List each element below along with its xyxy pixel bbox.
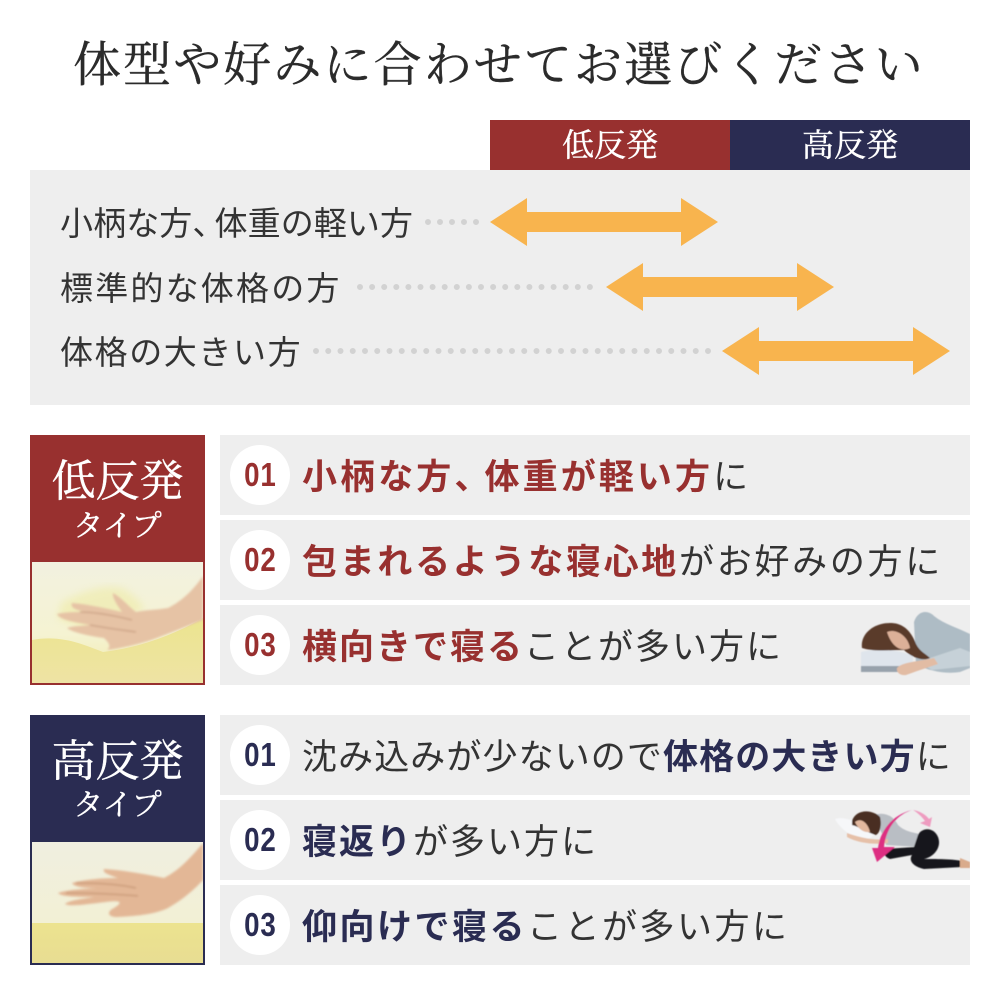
badge 03: [230, 895, 290, 955]
arrow: small build range: [490, 198, 718, 246]
label: standard build: 標準的な体格の方: [60, 270, 342, 307]
dots: row 3: [316, 348, 709, 354]
panel: high rebound type: [30, 715, 205, 965]
header: high rebound: 高反発: [802, 127, 898, 163]
heading: high rebound: 高反発: [52, 737, 184, 786]
dots: row 1: [428, 219, 477, 225]
arrow: standard build range: [606, 263, 834, 311]
label: large build: 体格の大きい方: [60, 334, 302, 371]
panel: body type chart: [30, 170, 970, 405]
row: low 01: [220, 435, 970, 515]
photo: hand resting on firm foam: [32, 842, 203, 963]
icon: woman sleeping on side: [860, 612, 970, 676]
badge 02: 02: [244, 541, 276, 578]
icon: woman turning over with arrows: [836, 810, 970, 870]
arrow: large build range: [722, 327, 950, 375]
hand: [58, 843, 203, 917]
badge 02: 02: [244, 821, 276, 858]
header: low rebound: [490, 120, 730, 170]
badge 03: 03: [244, 906, 276, 943]
text: 横向きで寝ることが多い方に: [302, 628, 783, 667]
panel: low rebound type: [30, 435, 205, 685]
arrow: turning direction: [872, 810, 912, 862]
text: 小柄な方、体重が軽い方に: [302, 458, 751, 497]
badge 03: 03: [244, 626, 276, 663]
row: high 03: [220, 885, 970, 965]
chart: dotted leaders and arrows: [313, 198, 950, 375]
row: low 02: [220, 520, 970, 600]
title: 体型や好みに合わせてお選びください: [73, 39, 925, 92]
label: small build: 小柄な方、体重の軽い方: [60, 205, 413, 242]
photo: hand sinking into foam: [32, 562, 203, 683]
heading: type: タイプ: [73, 510, 162, 543]
text: 沈み込みが少ないので体格の大きい方に: [302, 738, 952, 777]
text: 包まれるような寝心地がお好みの方に: [302, 543, 943, 582]
row: high 01: [220, 715, 970, 795]
hand: [57, 576, 203, 650]
badge 01: [230, 725, 290, 785]
header: high rebound: [730, 120, 970, 170]
heading: type: タイプ: [73, 789, 162, 822]
text: 寝返りが多い方に: [302, 823, 598, 862]
badge 01: 01: [244, 736, 276, 773]
row: high 02: [220, 800, 970, 880]
header: low rebound: 低反発: [562, 127, 658, 163]
badge 02: [230, 530, 290, 590]
badge 03: [230, 615, 290, 675]
dots: row 2: [360, 284, 590, 290]
badge 01: [230, 445, 290, 505]
heading: low rebound: 低反発: [52, 457, 184, 506]
badge 02: [230, 810, 290, 870]
badge 01: 01: [244, 456, 276, 493]
text: 仰向けで寝ることが多い方に: [302, 908, 790, 947]
row: low 03: [220, 605, 970, 685]
